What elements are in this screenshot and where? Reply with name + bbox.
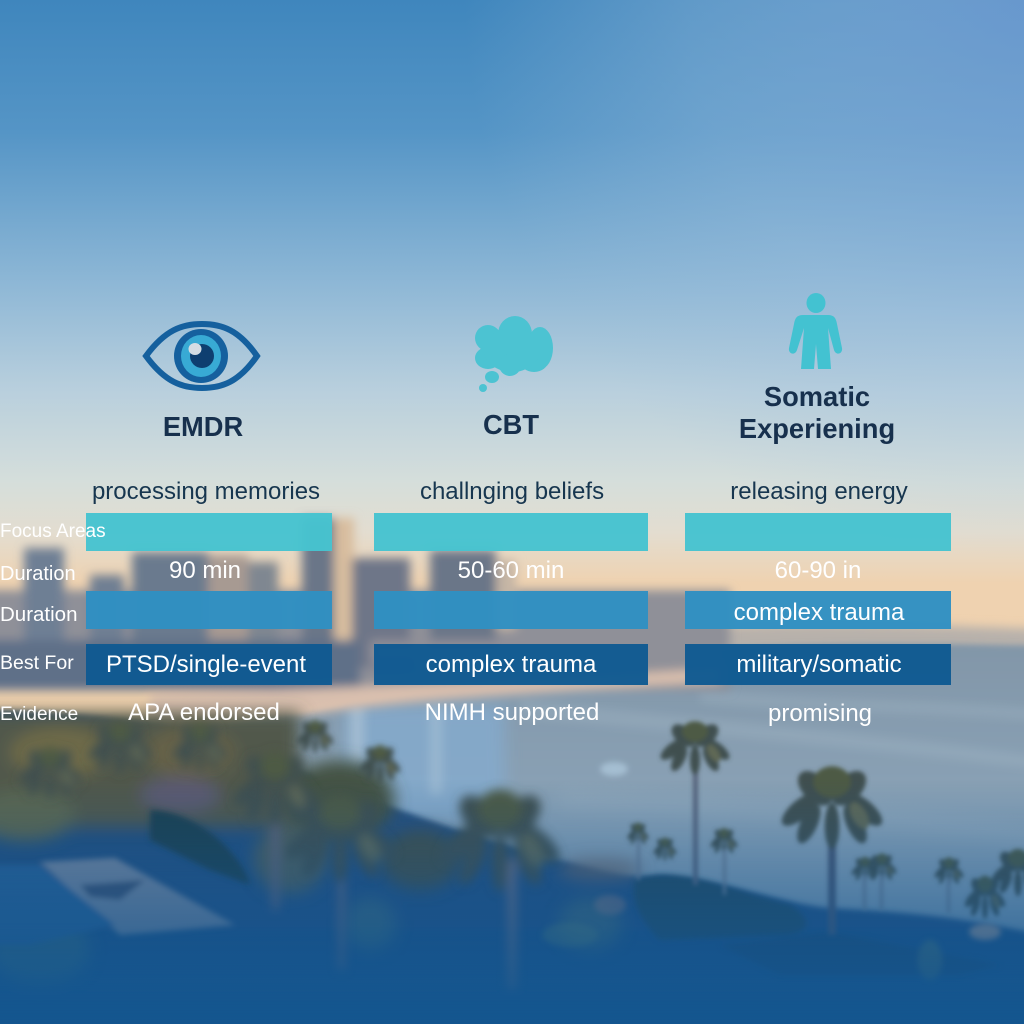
bar: complex trauma (CBT) <box>374 644 648 685</box>
skyline <box>0 518 730 720</box>
row label: Best For: Best For <box>0 652 74 674</box>
row label: Duration second: Duration <box>0 603 78 626</box>
text: releasing energy: releasing energy <box>730 478 908 505</box>
heading: Somatic Experiencing <box>739 381 895 444</box>
palm trees <box>626 720 1024 935</box>
row label: Focus Areas: Focus Areas <box>0 521 106 542</box>
heading: CBT: CBT <box>483 409 539 440</box>
column: EMDR header <box>142 321 261 442</box>
value: 50-60 min: 50-60 min <box>458 557 564 584</box>
bushes and paths <box>0 810 1001 980</box>
bar: EMDR duration <box>86 591 332 629</box>
value: military/somatic: military/somatic <box>736 651 902 678</box>
bar: PTSD/single-event <box>86 644 332 685</box>
bar: CBT duration <box>374 591 648 629</box>
value: complex trauma (Somatic): complex trauma <box>734 599 904 626</box>
icon: eye <box>142 321 261 391</box>
icon: thought cloud <box>475 316 553 392</box>
heading: Somatic Experiencing: Experiening <box>739 413 895 444</box>
value: 60-90 in: 60-90 in <box>775 557 861 584</box>
foreground land <box>0 710 1024 1024</box>
heading: EMDR: EMDR <box>163 411 243 442</box>
value: complex trauma: complex trauma <box>426 651 596 678</box>
fade to blue <box>0 780 1024 1024</box>
bar: EMDR focus <box>86 513 332 551</box>
bar: military/somatic <box>685 644 951 685</box>
icon: human figure <box>788 293 842 369</box>
row label: Evidence: Evidence <box>0 704 78 725</box>
water <box>200 644 1024 1000</box>
value: NIMH supported: NIMH supported <box>425 699 599 726</box>
text: challnging beliefs: challnging beliefs <box>420 478 604 505</box>
column: Somatic Experiencing header <box>739 293 895 444</box>
heading: Somatic Experiencing: Somatic <box>764 381 870 412</box>
bar: Somatic complex trauma <box>685 591 951 629</box>
row label: Duration: Duration <box>0 563 76 585</box>
value: PTSD/single-event: PTSD/single-event <box>106 651 306 678</box>
column: CBT header <box>475 316 553 440</box>
bar: Somatic focus <box>685 513 951 551</box>
vegetation <box>0 712 642 986</box>
horizon hills <box>600 624 1024 670</box>
value: APA endorsed: APA endorsed <box>128 699 280 726</box>
value: promising: promising <box>768 700 872 727</box>
bar: CBT focus <box>374 513 648 551</box>
value: 90 min: 90 min <box>169 557 241 584</box>
text: processing memories: processing memories <box>92 478 320 505</box>
